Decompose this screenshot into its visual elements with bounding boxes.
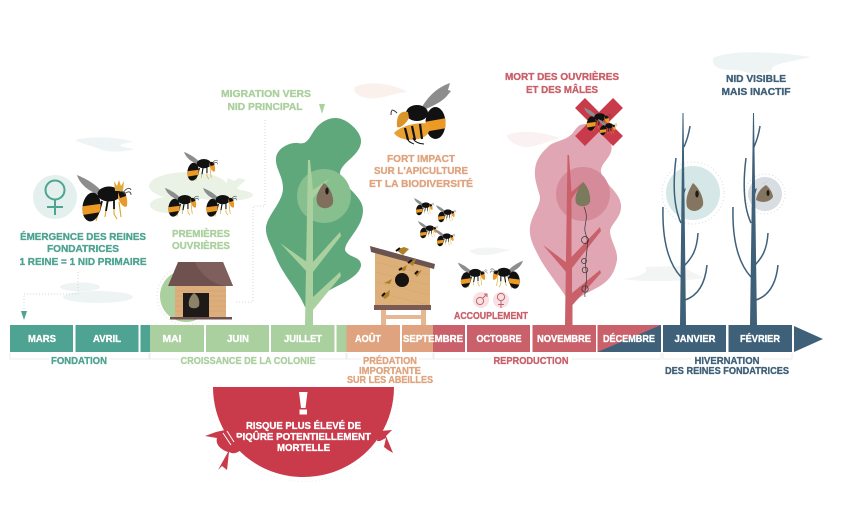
callout text	[236, 419, 372, 454]
label: reproduction: REPRODUCTION	[494, 355, 568, 367]
label: foundation: FONDATION	[51, 355, 107, 367]
text: visible inactive nest: NID VISIBLE	[726, 73, 786, 85]
label: predation on bees: PRÉDATION	[363, 354, 417, 367]
month labels: AOÛT	[355, 332, 382, 345]
month labels: MAI	[162, 333, 182, 345]
text: mating: ACCOUPLEMENT	[454, 310, 528, 322]
text: death of workers and males: ET DES MÂLES	[526, 83, 598, 96]
month labels: OCTOBRE	[476, 333, 522, 345]
label: overwintering: HIVERNATION	[694, 355, 760, 367]
dotted connector: migration	[235, 120, 265, 302]
text: emergence: ÉMERGENCE DES REINES	[20, 230, 146, 243]
text: strong impact: FORT IMPACT	[387, 153, 456, 165]
icon: female symbol badge	[33, 175, 77, 219]
icon: queen hornet with crown	[77, 175, 131, 223]
callout text: PIQÛRE POTENTIELLEMENT	[236, 430, 372, 443]
illustration: pink oak tree with nest	[530, 124, 621, 325]
month labels: DÉCEMBRE	[603, 332, 655, 345]
text: emergence	[20, 230, 146, 268]
text: emergence: 1 REINE = 1 NID PRIMAIRE	[20, 256, 146, 268]
arrow: emergence to March	[21, 311, 27, 320]
illustration: nest box	[157, 262, 233, 325]
month labels: AVRIL	[93, 333, 122, 345]
label: colony growth: CROISSANCE DE LA COLONIE	[180, 355, 316, 367]
background clouds	[60, 52, 811, 303]
month labels: JANVIER	[674, 333, 716, 345]
month labels: FÉVRIER	[740, 332, 780, 345]
label: predation on bees	[347, 354, 433, 386]
label: predation on bees: SUR LES ABEILLES	[347, 374, 433, 386]
month labels: SEPTEMBRE	[403, 333, 463, 345]
text: first workers	[172, 227, 230, 252]
illustration: green oak tree with nest	[266, 118, 363, 325]
month labels: NOVEMBRE	[537, 333, 591, 345]
text: migration: NID PRINCIPAL	[228, 101, 303, 113]
text: strong impact: ET LA BIODIVERSITÉ	[369, 177, 473, 190]
label: overwintering	[665, 355, 789, 377]
icon: large hornet attacking bee	[391, 83, 451, 144]
illustration: bare tree January	[662, 113, 724, 325]
icon: right ribbon	[377, 430, 393, 453]
text: migration	[221, 88, 311, 113]
label: predation on bees: IMPORTANTE	[359, 365, 421, 377]
icon: crossed-out hornets	[580, 103, 618, 141]
text: visible inactive nest	[722, 73, 791, 98]
text: visible inactive nest: MAIS INACTIF	[722, 86, 791, 98]
arrow: migration to main nest	[319, 104, 325, 114]
month labels	[28, 332, 780, 345]
text: first workers: PREMIÈRES	[172, 227, 230, 240]
month labels: MARS	[28, 333, 56, 345]
text: death of workers and males	[505, 70, 619, 96]
text: first workers: OUVRIÈRES	[172, 239, 230, 252]
callout text: RISQUE PLUS ÉLEVÉ DE	[246, 419, 361, 432]
icon: left ribbon	[205, 430, 243, 470]
text: death of workers and males: MORT DES OUVRIÈRES	[505, 70, 619, 83]
icons: male and female symbols	[473, 292, 509, 308]
illustration: beehive	[370, 246, 435, 325]
icon: exclamation mark	[299, 392, 308, 414]
text: strong impact: SUR L'APICULTURE	[374, 165, 468, 177]
icons: mating hornets	[458, 261, 523, 289]
timeline bar	[10, 325, 823, 352]
dotted connector: emergence to March	[24, 272, 78, 310]
month labels: JUIN	[227, 333, 249, 345]
green cloud behind workers	[149, 172, 253, 213]
callout text: MORTELLE	[277, 442, 330, 454]
phase brackets	[10, 353, 792, 359]
callout: sting risk	[205, 387, 399, 481]
text: migration: MIGRATION VERS	[221, 88, 311, 100]
text: strong impact	[369, 153, 473, 190]
illustration: bare tree February	[733, 113, 785, 325]
text: emergence: FONDATRICES	[47, 243, 119, 255]
month labels: JUILLET	[284, 333, 323, 345]
label: overwintering: DES REINES FONDATRICES	[665, 365, 789, 377]
icons: first workers	[165, 152, 236, 217]
icons: hornet swarm	[414, 198, 456, 247]
